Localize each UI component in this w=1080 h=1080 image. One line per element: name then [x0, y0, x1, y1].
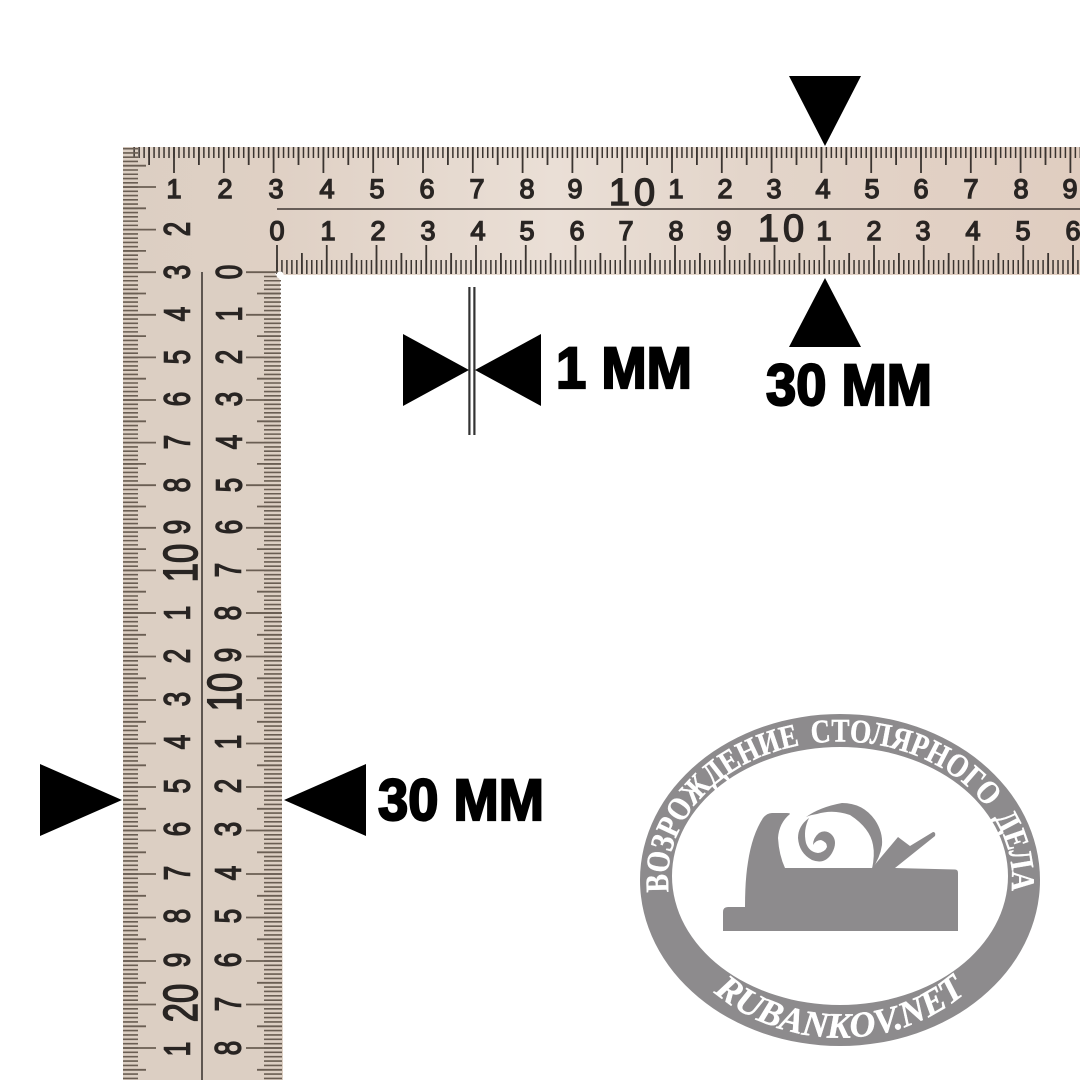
arrow: vertical arm width left: [40, 764, 122, 836]
vertical arm outer numbers: 1: [157, 1042, 198, 1056]
vertical arm outer numbers: 3: [157, 692, 198, 706]
horizontal arm bottom numbers: 10: [758, 208, 808, 250]
horizontal arm bottom numbers: 8: [668, 216, 684, 246]
vertical arm outer numbers: 9: [157, 520, 198, 534]
vertical arm outer numbers: 5: [157, 779, 198, 793]
horizontal arm bottom scale ticks: [276, 260, 1080, 267]
vertical arm outer numbers: 2: [157, 222, 198, 236]
horizontal arm top numbers: 1: [166, 174, 182, 204]
horizontal arm top numbers: 9: [567, 174, 583, 204]
vertical arm outer numbers: 8: [157, 478, 198, 492]
horizontal arm top numbers: 4: [815, 174, 831, 204]
marker: line thickness double rule: [468, 287, 476, 435]
horizontal arm top numbers: 6: [913, 174, 929, 204]
icon: hand plane with shaving: [723, 803, 958, 931]
vertical arm centre line: [201, 272, 203, 1080]
vertical arm inner numbers: 3: [208, 822, 249, 836]
notch at inner corner: [276, 271, 284, 279]
logo oval ring: [640, 714, 1040, 1046]
vertical arm outer numbers: 1: [157, 606, 198, 620]
vertical arm inner numbers: 6: [209, 520, 250, 534]
horizontal arm bottom numbers: 3: [915, 216, 931, 246]
horizontal arm sheen: [123, 147, 1080, 275]
horizontal arm top numbers: 1: [668, 174, 684, 204]
horizontal arm bottom numbers: 2: [866, 216, 882, 246]
vertical arm inner numbers: 2: [208, 779, 249, 793]
vertical arm outer numbers: 2: [157, 649, 198, 663]
horizontal arm bottom numbers: 4: [965, 216, 981, 246]
horizontal arm top numbers: 10: [609, 172, 659, 214]
label: line thickness 1 mm: 1 ММ: [556, 336, 692, 401]
vertical arm outer numbers: 7: [157, 866, 198, 880]
steel square ruler: [123, 147, 1080, 1080]
vertical arm inner numbers: 8: [208, 606, 249, 620]
horizontal arm bottom numbers: 3: [420, 216, 436, 246]
vertical arm outer numbers: 8: [157, 909, 198, 923]
horizontal arm bottom numbers: 5: [519, 216, 535, 246]
label: top arm width 30 mm: 30 ММ: [766, 353, 932, 418]
vertical arm inner numbers: 5: [208, 909, 249, 923]
ruler body: [123, 147, 1080, 1080]
vertical arm inner numbers: [197, 265, 251, 1055]
vertical arm outer numbers: 4: [157, 735, 198, 749]
vertical arm outer numbers: 6: [157, 822, 198, 836]
horizontal arm bottom numbers: 0: [269, 216, 285, 246]
horizontal arm bottom numbers: [269, 208, 1080, 250]
horizontal arm top numbers: 9: [1062, 174, 1078, 204]
vertical arm outer numbers: 4: [157, 307, 198, 321]
horizontal arm top numbers: 8: [1013, 174, 1029, 204]
horizontal arm top numbers: 7: [963, 174, 979, 204]
horizontal arm bottom numbers: 6: [569, 216, 585, 246]
vertical arm outer numbers: 9: [157, 953, 198, 967]
vertical arm outer scale ticks: [130, 148, 140, 1080]
horizontal arm centre line: [277, 208, 1080, 210]
horizontal arm top numbers: 2: [217, 174, 233, 204]
horizontal arm top numbers: 6: [419, 174, 435, 204]
vertical arm inner numbers: 4: [209, 435, 250, 449]
horizontal arm top numbers: 5: [864, 174, 880, 204]
arrow: top width marker down: [789, 76, 861, 146]
vertical arm outer numbers: [153, 222, 207, 1056]
logo: rubankov.net oval badge: [640, 714, 1040, 1046]
horizontal arm top numbers: 7: [469, 174, 485, 204]
horizontal arm top numbers: [166, 172, 1078, 214]
vertical arm inner numbers: 4: [208, 866, 249, 880]
vertical arm inner numbers: 10: [197, 673, 251, 711]
vertical arm outer numbers: 3: [157, 265, 198, 279]
vertical arm inner numbers: 2: [209, 350, 250, 364]
vertical arm outer numbers: 10: [153, 544, 207, 582]
arrow: vertical arm width right: [284, 764, 366, 836]
arrow: line thickness left: [403, 334, 469, 406]
horizontal arm bottom numbers: 5: [1015, 216, 1031, 246]
horizontal arm bottom numbers: 1: [320, 216, 336, 246]
horizontal arm bottom numbers: 7: [618, 216, 634, 246]
horizontal arm top numbers: 3: [766, 174, 782, 204]
horizontal arm top numbers: 2: [717, 174, 733, 204]
vertical arm inner numbers: 3: [209, 392, 250, 406]
arrow: line thickness right: [475, 334, 541, 406]
vertical arm inner numbers: 1: [209, 307, 250, 321]
horizontal arm top scale ticks: [133, 152, 1080, 160]
horizontal arm top numbers: 5: [369, 174, 385, 204]
horizontal arm top numbers: 8: [519, 174, 535, 204]
vertical arm outer numbers: 5: [157, 350, 198, 364]
vertical arm inner numbers: 9: [208, 648, 249, 662]
vertical arm inner numbers: 1: [208, 735, 249, 749]
vertical arm inner numbers: 0: [209, 265, 250, 279]
horizontal arm top numbers: 3: [268, 174, 284, 204]
vertical arm outer numbers: 6: [157, 392, 198, 406]
horizontal arm bottom numbers: 2: [370, 216, 386, 246]
vertical arm inner numbers: 7: [208, 997, 249, 1011]
label: vertical arm width 30 mm: 30 ММ: [378, 768, 544, 833]
vertical arm inner numbers: 6: [208, 953, 249, 967]
arrow: top width marker up: [789, 278, 861, 347]
horizontal arm bottom numbers: 4: [470, 216, 486, 246]
horizontal arm top numbers: 4: [319, 174, 335, 204]
vertical arm inner numbers: 8: [208, 1041, 249, 1055]
logo top lettering: ВОЗРОЖДЕНИЕ СТОЛЯРНОГО ДЕЛА: [646, 720, 1034, 892]
vertical arm outer numbers: 7: [157, 435, 198, 449]
vertical arm outer numbers: 20: [153, 984, 207, 1022]
horizontal arm bottom numbers: 1: [816, 216, 832, 246]
horizontal arm bottom numbers: 9: [716, 216, 732, 246]
vertical arm inner numbers: 7: [208, 563, 249, 577]
logo bottom lettering: RUBANKOV.NET: [712, 972, 962, 1038]
vertical arm inner numbers: 5: [209, 478, 250, 492]
vertical arm inner scale ticks: [264, 271, 273, 1080]
